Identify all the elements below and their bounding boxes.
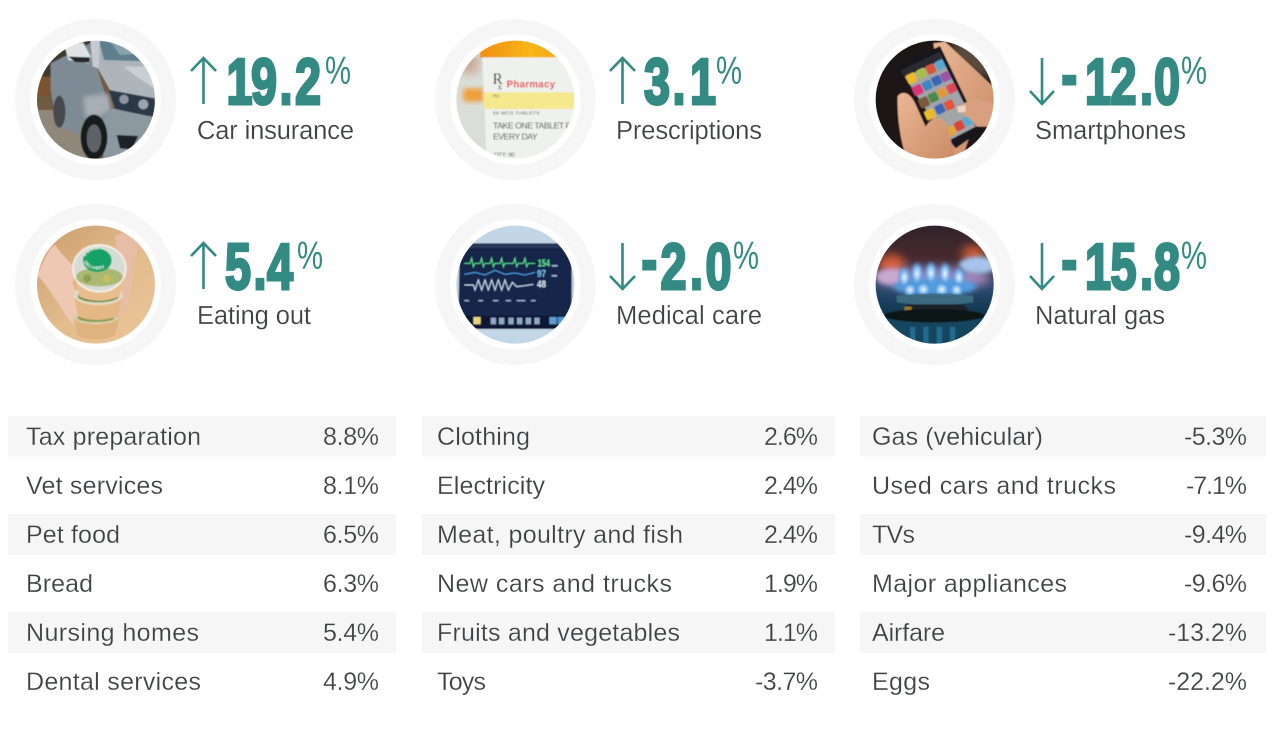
arrow down [1030, 243, 1054, 289]
row: Used cars and trucks [872, 472, 1247, 500]
row: Nursing homes: 5.4% [323, 619, 379, 647]
value: 3.1%: 3.1 [644, 47, 716, 119]
row: Clothing [437, 423, 818, 451]
row: Vet services: Vet services [26, 472, 163, 500]
value: 19.2%: % [325, 50, 351, 93]
row: Tax preparation [26, 423, 379, 451]
table: right column [860, 416, 1266, 696]
table: middle column [422, 416, 835, 696]
row: Airfare: Airfare [872, 619, 945, 647]
row: Eggs: -22.2% [1168, 668, 1247, 696]
value: 5.4%: 5.4 [225, 232, 293, 304]
arrow up [191, 243, 216, 289]
row: Dental services: 4.9% [323, 668, 379, 696]
photo: pharmacy bottle: R [493, 71, 503, 88]
row: New cars and trucks: 1.9% [764, 570, 818, 598]
photo: pharmacy bottle: Rx: [493, 93, 500, 99]
photo: smartphone in hands [876, 40, 994, 159]
panel: smartphones stat [862, 26, 1207, 172]
row: Nursing homes [26, 619, 379, 647]
row: Gas (vehicular): -5.3% [1184, 423, 1247, 451]
row: Nursing homes: Nursing homes [26, 619, 199, 647]
row: Fruits and vegetables: Fruits and vegetables [437, 619, 680, 647]
row: Dental services [26, 668, 379, 696]
value: -12.0%: -12.0 [1061, 40, 1180, 119]
value: 19.2%: 19.2 [227, 47, 321, 119]
arrow up [610, 58, 635, 104]
photo: food delivery containers [37, 226, 155, 344]
photo: pharmacy bottle: QTY: 90 [494, 153, 515, 159]
row: Airfare [872, 619, 1247, 647]
row: Meat, poultry and fish: Meat, poultry and fish [437, 521, 683, 549]
icon ring: natural gas [862, 212, 1008, 358]
photo: patient monitor: 97 [537, 269, 546, 280]
arrow up [191, 58, 216, 104]
panel: natural gas stat [862, 212, 1207, 358]
panel: medical care stat [442, 212, 762, 358]
row: Clothing: 2.6% [764, 423, 818, 451]
row: Vet services: 8.1% [323, 472, 379, 500]
label: Medical care: Medical care [616, 302, 762, 330]
label: Prescriptions: Prescriptions [616, 117, 762, 145]
value: 5.4% [225, 232, 323, 304]
arrow down [1030, 58, 1054, 104]
photo: pharmacy bottle [456, 40, 574, 158]
label: Eating out: Eating out [197, 302, 311, 330]
label: Natural gas: Natural gas [1035, 302, 1165, 330]
row: Eggs: Eggs [872, 668, 930, 696]
row: Major appliances: -9.6% [1184, 570, 1247, 598]
row: Major appliances: Major appliances [872, 570, 1067, 598]
row: Electricity [437, 472, 818, 500]
row: Bread: 6.3% [323, 570, 379, 598]
panel: eating out stat [15, 204, 323, 365]
value: -2.0%: -2.0 [642, 225, 732, 304]
photo: food delivery containers: DELIVERY [84, 260, 105, 270]
panel: car insurance stat [22, 26, 354, 172]
icon ring: car insurance [22, 26, 168, 172]
icon ring: eating out [22, 212, 168, 358]
row: Meat, poultry and fish [437, 521, 818, 549]
row: Airfare: -13.2% [1168, 619, 1247, 647]
row: Used cars and trucks: -7.1% [1186, 472, 1247, 500]
row: Tax preparation: Tax preparation [26, 423, 201, 451]
row: Pet food: Pet food [26, 521, 120, 549]
row: Vet services [26, 472, 379, 500]
row: Eggs [872, 668, 1247, 696]
row: Gas (vehicular): Gas (vehicular) [872, 423, 1043, 451]
photo: patient monitor: 48 [537, 279, 546, 290]
row: TVs: TVs [872, 521, 915, 549]
row: New cars and trucks [437, 570, 818, 598]
row: Bread: Bread [26, 570, 93, 598]
row: Clothing: Clothing [437, 423, 530, 451]
value: -15.8%: -15.8 [1061, 225, 1180, 304]
photo: pharmacy bottle: 50 MCG TABLETS [493, 111, 540, 117]
row: Electricity: Electricity [437, 472, 546, 500]
row: Pet food [26, 521, 379, 549]
photo: pharmacy bottle: EVERY DAY [493, 131, 538, 141]
icon ring: smartphones [862, 26, 1008, 172]
row: TVs [872, 521, 1247, 549]
label: Smartphones: Smartphones [1035, 117, 1186, 145]
photo: gas burner flame [873, 223, 998, 347]
row: Bread [26, 570, 379, 598]
label: Car insurance: Car insurance [197, 117, 354, 145]
row: Toys: -3.7% [755, 668, 818, 696]
value: -12.0%: % [1181, 50, 1207, 93]
photo: patient monitor: 154 [538, 259, 550, 270]
row: Meat, poultry and fish: 2.4% [764, 521, 818, 549]
row: Pet food: 6.5% [323, 521, 379, 549]
row: Dental services: Dental services [26, 668, 201, 696]
row: Fruits and vegetables [437, 619, 818, 647]
photo: pharmacy bottle: Pharmacy [507, 79, 556, 90]
row: Toys: Toys [437, 668, 486, 696]
row: Gas (vehicular) [872, 423, 1247, 451]
arrow down [610, 243, 635, 289]
value: -15.8%: % [1181, 235, 1207, 278]
row: Used cars and trucks: Used cars and trucks [872, 472, 1116, 500]
panel: prescriptions stat [442, 26, 762, 172]
icon ring: medical care [442, 212, 588, 358]
row: Electricity: 2.4% [764, 472, 818, 500]
row: Toys [437, 668, 818, 696]
photo: patient monitor [456, 226, 574, 344]
value: 3.1%: % [716, 50, 742, 93]
photo: food delivery containers: FOOD [84, 246, 98, 257]
icon ring: prescriptions [442, 26, 588, 172]
photo: pharmacy bottle: TAKE ONE TABLET P [493, 121, 572, 131]
row: Tax preparation: 8.8% [323, 423, 379, 451]
row: Major appliances [872, 570, 1247, 598]
photo: silver car [37, 40, 155, 159]
photo: pharmacy bottle: x [498, 81, 503, 91]
value: 5.4%: % [297, 235, 323, 278]
value: -2.0%: % [733, 235, 759, 278]
row: TVs: -9.4% [1184, 521, 1247, 549]
table: left column [8, 416, 396, 696]
row: Fruits and vegetables: 1.1% [764, 619, 818, 647]
row: New cars and trucks: New cars and trucks [437, 570, 672, 598]
